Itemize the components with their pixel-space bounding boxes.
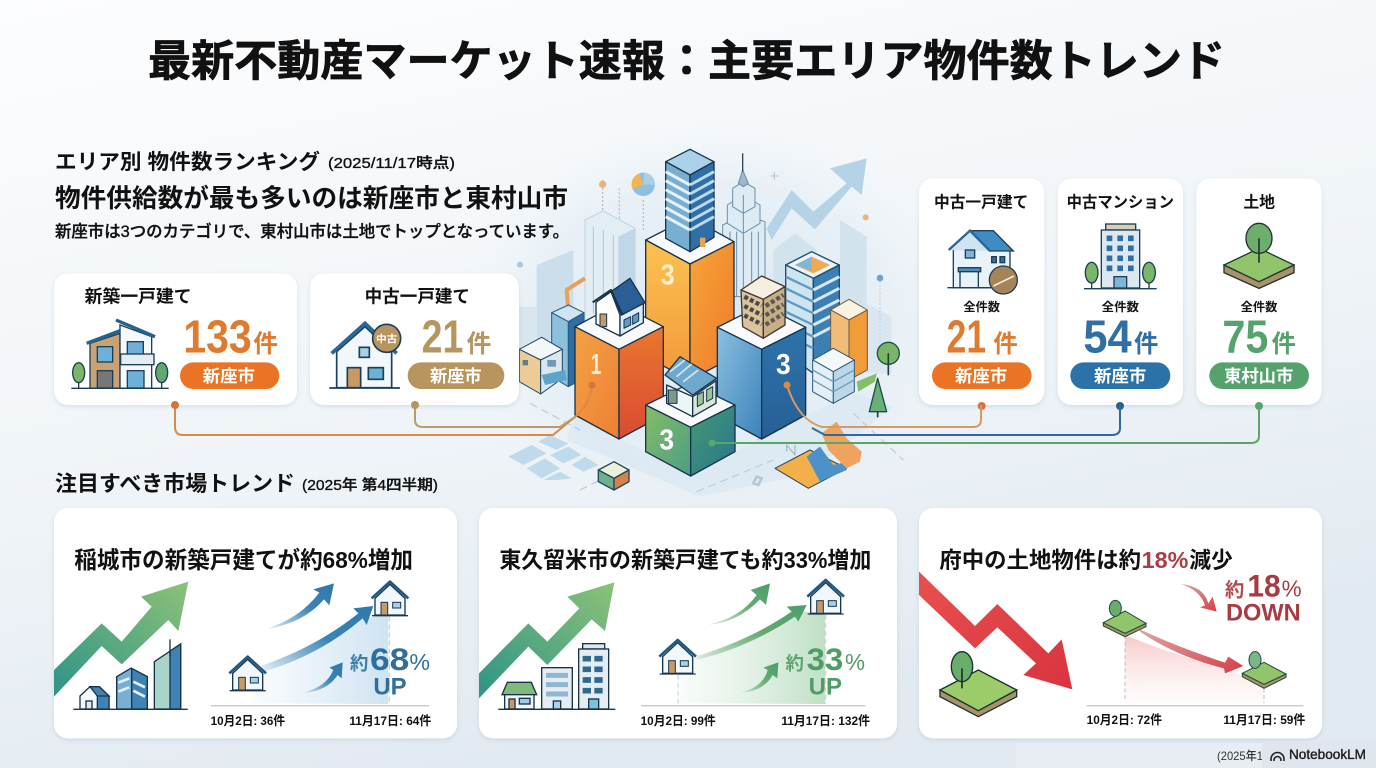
heading: 中古マンション xyxy=(1067,194,1174,212)
date labels: 11月17日: 64件 xyxy=(349,713,431,728)
pill xyxy=(408,362,504,389)
callout: 68% up: 68 xyxy=(370,642,409,677)
pill xyxy=(180,362,279,389)
label: 全件数 xyxy=(963,299,1000,314)
chart: house growth xyxy=(641,580,865,706)
icon: house xyxy=(947,231,1017,294)
chart: house growth xyxy=(211,582,429,706)
callout: 33% up: % xyxy=(845,649,865,675)
panel: land xyxy=(1196,178,1322,410)
callout: 33% up: UP xyxy=(809,673,842,700)
dot xyxy=(1116,402,1124,410)
block: green 3 with house: 3 xyxy=(659,424,674,456)
heading: area ranking: (2025/11/17時点) xyxy=(328,155,455,172)
date labels: 11月17日: 59件 xyxy=(1223,712,1305,727)
callout: 33% up: 33 xyxy=(807,642,843,677)
heading: 18% xyxy=(1142,547,1188,573)
block: orange 1 with house: 1 xyxy=(591,349,601,381)
icon: land plot xyxy=(940,652,1017,717)
panel: Fuchu trend xyxy=(919,508,1322,738)
count: 件 xyxy=(993,331,1018,358)
footer strip xyxy=(1016,743,1262,768)
count: 21 xyxy=(422,311,463,363)
heading: 稲城市の新築戸建てが約68%増加 xyxy=(74,546,413,573)
arrow: large red down xyxy=(919,572,1072,689)
date labels xyxy=(641,713,870,728)
heading: market trends: (2025年 第4四半期) xyxy=(302,476,438,494)
heading: 土地 xyxy=(1243,194,1275,212)
heading: 中古一戸建て xyxy=(365,287,470,307)
date labels: 11月17日: 132件 xyxy=(781,713,870,728)
date labels: 10月2日: 99件 xyxy=(641,713,716,728)
icon: condo building xyxy=(1084,224,1157,289)
heading: area ranking xyxy=(55,150,455,174)
icon: buildings xyxy=(73,639,188,709)
count xyxy=(1083,311,1158,363)
background skyline and rising arrow xyxy=(517,158,892,373)
icon: shops and towers xyxy=(498,644,615,709)
panel: Inagi trend xyxy=(54,508,457,738)
connector: new detached to block 1 xyxy=(175,385,592,435)
peach building xyxy=(831,299,867,380)
callout: 18% down: DOWN xyxy=(1226,600,1301,627)
label: 全件数 xyxy=(1102,299,1139,314)
pill: 新座市 xyxy=(203,366,255,386)
ground map tiles xyxy=(508,403,903,492)
callout: 33% up xyxy=(786,642,865,700)
heading: 新築一戸建て xyxy=(85,286,192,307)
dot xyxy=(978,402,986,410)
callout: 68% up: UP xyxy=(373,673,407,700)
heading: market trends xyxy=(55,472,438,496)
pill: 新座市 xyxy=(430,366,482,386)
block: orange 1 with house xyxy=(575,278,663,439)
heading xyxy=(939,547,1233,573)
callout: 68% up: 約 xyxy=(350,653,368,674)
count: 件 xyxy=(1272,331,1296,358)
icon: pie chart xyxy=(632,173,655,196)
count: 件 xyxy=(1134,331,1158,358)
date labels: 10月2日: 36件 xyxy=(211,713,285,728)
heading: 中古一戸建て xyxy=(934,194,1028,212)
notebooklm badge xyxy=(1262,741,1376,768)
notebooklm badge: NotebookLM xyxy=(1289,746,1366,762)
ground shadows xyxy=(567,393,893,497)
block: blue 3 with building xyxy=(717,276,806,439)
pill: 新座市 xyxy=(1094,366,1146,386)
summary text: 新座市は3つのカテゴリで、東村山市は土地でトップとなっています。 xyxy=(55,221,569,241)
pill xyxy=(932,362,1032,389)
callout: 18% down: % xyxy=(1282,576,1302,602)
chart tile xyxy=(753,422,862,488)
count: 件 xyxy=(467,330,491,358)
arrow: large green up xyxy=(479,582,614,698)
pill: 東村山市 xyxy=(1224,366,1293,386)
chart: land decline xyxy=(1087,600,1303,706)
block: blue 3 with building: 3 xyxy=(776,349,791,381)
icon: land plot xyxy=(1224,223,1294,288)
connector: used detached right xyxy=(787,385,981,427)
footer source note: (2025年1 xyxy=(1217,749,1263,763)
heading: 府中の土地物件は約 xyxy=(939,547,1141,573)
skyscraper xyxy=(723,153,765,297)
count: 75 xyxy=(1222,311,1268,363)
count: 件 xyxy=(253,330,278,358)
arrow: small red xyxy=(1181,584,1217,612)
heading: 減少 xyxy=(1189,547,1233,573)
connector: mansion xyxy=(812,405,1120,435)
panel: used detached house right xyxy=(919,178,1044,410)
callout: 18% down xyxy=(1225,569,1302,627)
heading: area ranking: エリア別 物件数ランキング xyxy=(55,150,320,174)
dot xyxy=(1255,402,1263,410)
callout: 18% down: 18 xyxy=(1247,569,1281,604)
block: green 3 with house xyxy=(646,357,735,476)
date labels xyxy=(1087,712,1305,727)
heading: 東久留米市の新築戸建ても約33%増加 xyxy=(499,547,871,573)
label: 全件数 xyxy=(1241,299,1277,314)
panel: Higashikurume trend xyxy=(479,508,897,738)
connector: land xyxy=(712,405,1259,443)
arrow: large green up xyxy=(54,582,188,697)
pill xyxy=(1070,362,1170,389)
panel: used condo xyxy=(1058,178,1183,410)
headline: top supply: 物件供給数が最も多いのは新座市と東村山市 xyxy=(55,184,568,213)
connector dots on blocks xyxy=(588,382,790,446)
connector: used detached to block 1 xyxy=(415,405,575,427)
count: 54 xyxy=(1083,311,1132,363)
small white building and trees xyxy=(813,342,899,417)
connector stubs under right cards xyxy=(981,405,1259,412)
connector dots: left cards xyxy=(171,401,419,409)
callout: 18% down: 約 xyxy=(1225,580,1244,602)
badge text: 中古 xyxy=(376,333,397,346)
date labels xyxy=(211,713,431,728)
date labels: 10月2日: 72件 xyxy=(1087,712,1162,727)
icon: modern house xyxy=(71,320,169,388)
striped building xyxy=(786,252,839,373)
callout: 68% up: % xyxy=(409,649,430,675)
illustration background wash xyxy=(460,120,960,520)
heading: market trends: 注目すべき市場トレンド xyxy=(55,472,295,496)
count: 133 xyxy=(183,311,252,363)
title: 最新不動産マーケット速報：主要エリア物件数トレンド xyxy=(148,38,1225,86)
small cube xyxy=(598,462,629,490)
central isometric city illustration xyxy=(508,149,903,497)
block: orange 3 with tower: 3 xyxy=(661,260,675,292)
panel: used detached house xyxy=(310,273,519,405)
count: 21 xyxy=(947,311,986,363)
small left buildings and crane xyxy=(519,278,585,394)
callout: 33% up: 約 xyxy=(786,653,804,674)
icon: used house xyxy=(329,323,401,388)
panel: new detached house xyxy=(54,273,297,405)
pill xyxy=(1209,362,1309,389)
callout: 68% up xyxy=(350,642,430,700)
pill: 新座市 xyxy=(955,366,1007,386)
block: orange 3 with tower xyxy=(646,149,734,380)
